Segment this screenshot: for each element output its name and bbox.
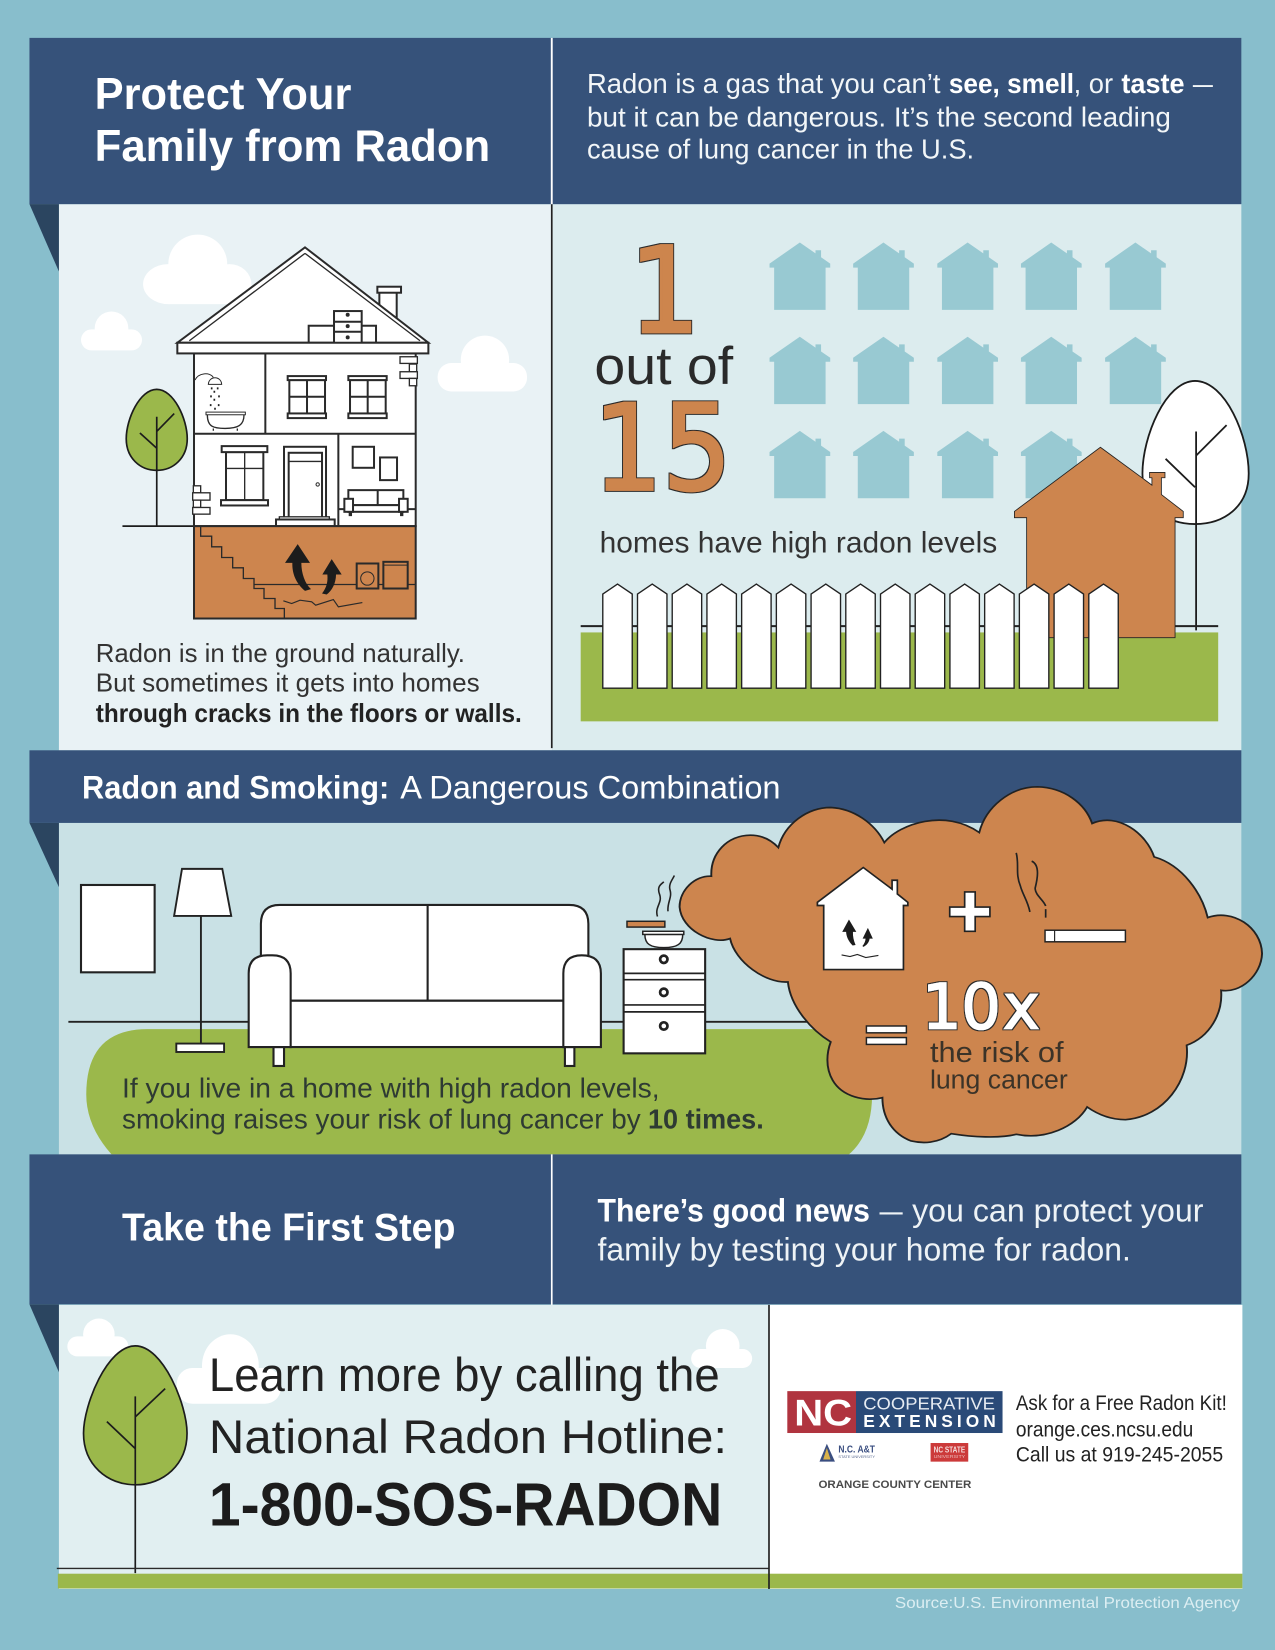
contact text: Ask for a Free Radon Kit! xyxy=(1016,1392,1227,1415)
risk text: If you live in a home with high radon levels, xyxy=(122,1073,660,1104)
logo: NC State: UNIVERSITY xyxy=(934,1454,965,1459)
logo: NC Cooperative Extension xyxy=(787,1391,1003,1433)
intro text: Radon is a gas that you can’t xyxy=(587,68,941,99)
upstairs windows xyxy=(288,376,387,418)
roof xyxy=(177,247,428,343)
panel: hotline xyxy=(59,1305,769,1589)
out of: out of xyxy=(594,337,734,396)
title: Family from Radon xyxy=(95,122,490,171)
basement xyxy=(194,526,416,619)
title: Protect Your xyxy=(95,70,351,119)
logo: N.C. A&T: STATE UNIVERSITY xyxy=(838,1455,875,1459)
icon: equals xyxy=(866,1026,906,1044)
cloud large xyxy=(143,235,251,304)
green rug xyxy=(86,1029,872,1154)
first step heading: Take the First Step xyxy=(122,1207,456,1250)
homes have high radon levels: homes have high radon levels xyxy=(600,526,997,559)
intro text: cause of lung cancer in the U.S. xyxy=(587,133,974,164)
intro text: — xyxy=(1193,68,1213,99)
attic furniture xyxy=(309,311,376,347)
logo: N.C. A&T: N.C. A&T xyxy=(838,1445,875,1456)
intro text: but it can be dangerous. It’s the second leading xyxy=(587,101,1171,132)
downstairs window xyxy=(221,446,268,505)
contact text: Call us at 919-245-2055 xyxy=(1016,1444,1223,1467)
bathroom xyxy=(195,374,245,431)
risk text: 10 times. xyxy=(648,1104,764,1135)
white tree xyxy=(1142,381,1249,630)
risk text xyxy=(122,1073,764,1135)
picket fence xyxy=(603,584,1118,688)
radon in ground text xyxy=(96,640,522,728)
icon: house with radon xyxy=(817,868,908,970)
good news text: There’s good news xyxy=(598,1192,870,1229)
logo: NC Cooperative Extension: EXTENSION xyxy=(863,1411,996,1431)
number 15: 15 xyxy=(593,380,732,518)
logo: NC Cooperative Extension: NC xyxy=(794,1392,852,1433)
hotline text xyxy=(209,1349,727,1538)
nightstand xyxy=(624,949,705,1053)
the risk of lung cancer: lung cancer xyxy=(930,1065,1068,1095)
crack xyxy=(283,600,362,607)
intro text: see, smell xyxy=(949,68,1074,99)
radon in ground text: But sometimes it gets into homes xyxy=(96,669,480,697)
panel: smoking xyxy=(59,823,1241,1154)
bricks xyxy=(193,357,417,514)
hotline text: 1-800-SOS-RADON xyxy=(209,1470,722,1538)
orange county center: ORANGE COUNTY CENTER xyxy=(818,1479,971,1491)
source: Source:U.S. Environmental Protection Agency xyxy=(895,1595,1240,1612)
floor lamp xyxy=(174,869,231,1052)
orange house xyxy=(1014,447,1183,638)
band: take the first step xyxy=(29,1154,1241,1372)
logo: NC State xyxy=(931,1443,968,1462)
band: radon and smoking xyxy=(29,750,1241,887)
washer and dryer xyxy=(357,562,408,589)
header band xyxy=(29,38,1241,271)
walls and floors xyxy=(177,343,428,526)
10x: x xyxy=(1003,971,1040,1044)
chimney xyxy=(377,287,401,322)
smoking heading xyxy=(82,769,781,806)
smoking heading: Radon and Smoking: xyxy=(82,769,389,806)
divider top panels xyxy=(551,204,553,748)
arrows: radon rising xyxy=(285,544,342,595)
tree green xyxy=(122,389,194,526)
10x: 10 xyxy=(922,971,1001,1044)
contact text xyxy=(1016,1392,1227,1467)
good news text: — xyxy=(879,1192,903,1229)
good news text xyxy=(598,1192,1204,1268)
radon in ground text: Radon is in the ground naturally. xyxy=(96,640,465,668)
house icon grid xyxy=(770,243,1166,498)
door xyxy=(276,447,335,526)
house cross-section xyxy=(177,247,428,619)
sofa xyxy=(249,905,601,1066)
icon: plus xyxy=(950,892,990,931)
wall picture xyxy=(81,885,155,972)
icon: cigarette with smoke xyxy=(1016,853,1125,942)
logo: N.C. A&T xyxy=(819,1444,875,1462)
panel: radon in homes, left xyxy=(59,204,552,750)
lawn xyxy=(581,626,1218,721)
title xyxy=(95,70,490,171)
clouds xyxy=(67,1319,752,1404)
smoking heading: A Dangerous Combination xyxy=(400,769,781,806)
intro text: , or xyxy=(1074,68,1113,99)
panel: 1 out of 15 xyxy=(552,204,1249,750)
intro text: taste xyxy=(1121,68,1185,99)
cloud small xyxy=(81,311,142,350)
good news text: you can protect your xyxy=(912,1192,1204,1229)
10x xyxy=(922,971,1040,1044)
hotline text: Learn more by calling the xyxy=(209,1349,720,1402)
logo: NC Cooperative Extension: COOPERATIVE xyxy=(863,1393,995,1413)
good news text: family by testing your home for radon. xyxy=(598,1231,1131,1268)
intro text xyxy=(587,68,1213,164)
logo: NC State: NC STATE xyxy=(934,1446,965,1455)
the risk of lung cancer xyxy=(930,1037,1068,1095)
pictures and sofa xyxy=(344,447,408,516)
hotline text: National Radon Hotline: xyxy=(209,1411,727,1464)
number 1: 1 xyxy=(629,223,700,361)
risk text: smoking raises your risk of lung cancer by xyxy=(122,1104,641,1135)
cloud right xyxy=(438,336,527,391)
radon smoke cloud xyxy=(680,787,1262,1142)
tree green xyxy=(84,1346,187,1573)
contact text: orange.ces.ncsu.edu xyxy=(1016,1418,1193,1441)
the risk of lung cancer: the risk of xyxy=(930,1037,1064,1069)
panel: contact xyxy=(769,1305,1242,1589)
ashtray and cigarette xyxy=(627,876,684,948)
ground strip xyxy=(57,1305,1242,1589)
radon in ground text: through cracks in the floors or walls. xyxy=(96,700,522,728)
